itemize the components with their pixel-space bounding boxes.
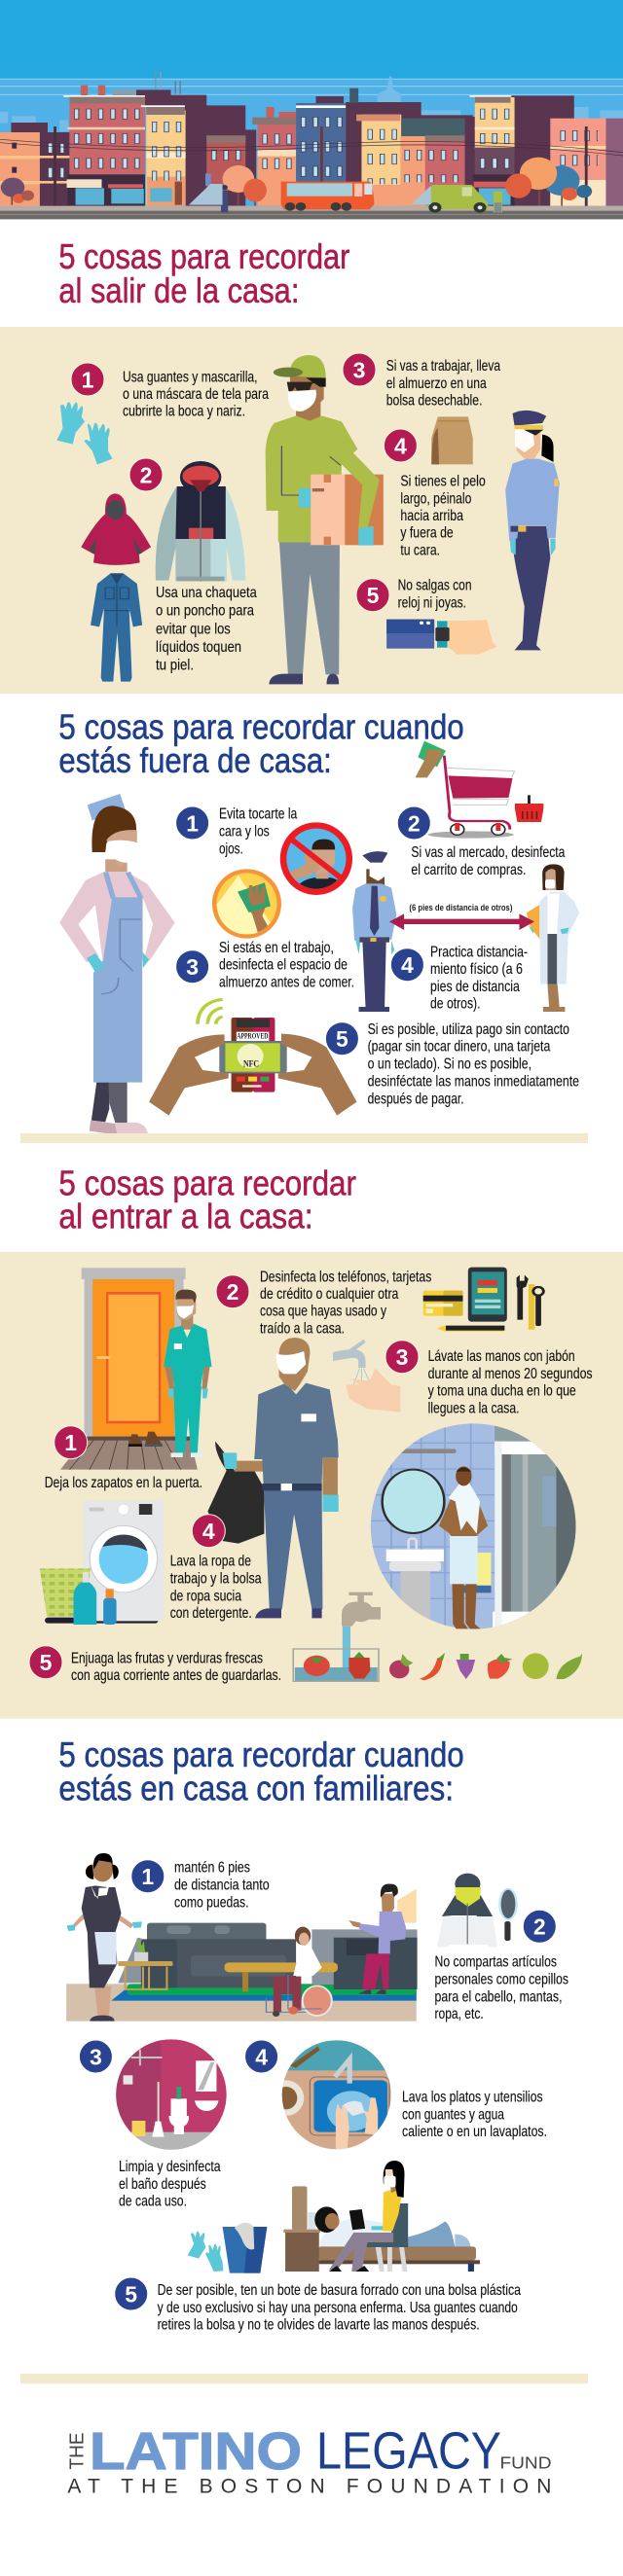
step 2 badge: [216, 1275, 249, 1308]
step 1 text: como puedas.: [174, 1894, 249, 1911]
step 1 badge: 1: [64, 1430, 77, 1455]
heading: al entrar a la casa: 5 cosas para recordar: [58, 1163, 356, 1202]
step 1 text: Evita tocarte la: [219, 806, 297, 823]
step 4 text: tu cara.: [400, 543, 440, 559]
step 2 text: de crédito o cualquier otra: [260, 1286, 398, 1303]
step 1 badge: [176, 806, 209, 840]
illustration: door with shoes: [60, 1268, 198, 1470]
step 1 text: [174, 1860, 270, 1911]
icon: blue coveralls: [91, 573, 142, 682]
step 5 text: con agua corriente antes de guardarlas.: [71, 1667, 281, 1684]
beige divider strip: [20, 1133, 588, 1143]
step 5 text: [71, 1650, 281, 1684]
step 3 text: Limpia y desinfecta: [119, 2159, 221, 2175]
figure: police officer: [352, 851, 396, 1012]
step 5 badge: [356, 579, 389, 612]
step 2 text: cosa que hayas usado y: [260, 1304, 386, 1320]
icon: shopping cart with basket: [416, 741, 543, 839]
step 3 badge: [79, 2040, 112, 2073]
illustration: living room with family: [66, 1853, 418, 2021]
step 3 text: el almuerzo en una: [386, 376, 487, 392]
step 3 badge: [385, 1341, 419, 1374]
step 3 text: [119, 2159, 221, 2210]
step 2 badge: [523, 1910, 556, 1943]
step 4 text: de otros).: [430, 996, 481, 1013]
step 3 text: almuerzo antes de comer.: [219, 975, 354, 991]
icon: paper bag: [431, 416, 473, 464]
step 4 text: trabajo y la bolsa: [170, 1570, 262, 1587]
icon: wrist with watch: [386, 620, 496, 655]
icon: gloves: [56, 402, 113, 464]
step 5 badge: [325, 1022, 358, 1055]
panel: beige background: [0, 1252, 623, 1719]
icon: fruits and vegetables row: [389, 1653, 582, 1680]
logo: The Latino Legacy Fund at the Boston Foundation: AT THE BOSTON FOUNDATION: [67, 2476, 551, 2498]
step 1 text: ojos.: [219, 841, 243, 858]
step 2 text: líquidos toquen: [156, 639, 241, 656]
icon: cards, tablet, tools: [423, 1268, 543, 1332]
step 2 badge: [129, 458, 163, 491]
icon: jacket: [156, 461, 245, 582]
step 1 text: cubrirte la boca y nariz.: [123, 404, 245, 420]
icon: jacket and hairbrush: [437, 1874, 518, 1948]
step 4 badge: 4: [401, 952, 414, 978]
step 4 text: pies de distancia: [430, 979, 520, 995]
step 2 text: o un poncho para: [156, 603, 254, 620]
heading: fuera de casa: estás fuera de casa:: [58, 740, 332, 780]
step 1 text: mantén 6 pies: [174, 1860, 250, 1877]
step 4 text: Lava la ropa de: [170, 1554, 251, 1570]
step 4 badge: [384, 429, 417, 462]
step 3 text: Si vas a trabajar, lleva: [386, 358, 500, 375]
icon: contactless payment: NFC: [243, 1059, 259, 1069]
step 4 badge: 4: [202, 1519, 215, 1544]
step 3 text: bolsa desechable.: [386, 393, 483, 410]
step 5 text: después de pagar.: [368, 1091, 464, 1107]
heading: al salir de la casa: 5 cosas para recordar: [58, 236, 349, 276]
step 5 text: (pagar sin tocar dinero, una tarjeta: [368, 1039, 550, 1055]
icon: contactless payment: APPROVED: [237, 1032, 269, 1041]
icon: faucet and washing hands: [333, 1340, 400, 1413]
label: 6 feet distance: (6 pies de distancia de otros): [409, 903, 512, 913]
icon: trash bin and gloves: [188, 2223, 267, 2273]
illustration: caring for sick person in bed: [283, 2161, 480, 2272]
icon: contactless payment: [149, 999, 357, 1116]
step 4 text: largo, péinalo: [400, 490, 471, 507]
step 2 text: traído a la casa.: [260, 1320, 345, 1337]
step 3 badge: [343, 353, 376, 386]
step 3 text: [219, 940, 354, 991]
step 2 text: Si vas al mercado, desinfecta: [411, 844, 565, 861]
step 2 text: el carrito de compras.: [411, 862, 526, 878]
step 3 badge: 3: [90, 2044, 102, 2069]
arrow: 6 feet distance: [389, 913, 534, 930]
step 3 text: Si estás en el trabajo,: [219, 940, 334, 956]
step 5 text: Enjuaga las frutas y verduras frescas: [71, 1650, 263, 1666]
step 4 text: [402, 2090, 547, 2140]
illustration: dishwashing circle: [282, 2040, 391, 2150]
step 5 text: [158, 2282, 521, 2334]
step 2 text: No compartas artículos: [434, 1954, 557, 1971]
figure: police woman: [505, 411, 560, 650]
step 2 badge: 2: [227, 1279, 238, 1305]
step 4 text: Practica distancia-: [430, 944, 528, 960]
step 2 badge: 2: [408, 810, 421, 836]
step 4 text: Lava los platos y utensilios: [402, 2090, 543, 2106]
step 4 badge: 4: [394, 433, 407, 458]
step 3 text: [428, 1348, 593, 1416]
step 2 badge: [397, 806, 430, 840]
step 3 text: Lávate las manos con jabón: [428, 1348, 575, 1365]
step 2 text: [156, 585, 257, 674]
figure: man with box: [266, 355, 384, 684]
step 3 text: y toma una ducha en lo que: [428, 1383, 576, 1400]
step 3 badge: 3: [396, 1344, 408, 1370]
heading: fuera de casa: [58, 706, 464, 780]
logo: The Latino Legacy Fund at the Boston Foundation: LEGACY: [316, 2422, 501, 2481]
heading: al entrar a la casa: al entrar a la casa:: [58, 1197, 313, 1236]
step 5 text: No salgas con: [398, 578, 471, 594]
step 3 badge: 3: [353, 357, 365, 382]
figure: man holding trash bag: [207, 1338, 339, 1618]
figure: nurse in apron: [59, 794, 175, 1135]
figure: man in scrubs: [164, 1290, 212, 1457]
step 4 text: y fuera de: [400, 525, 454, 542]
step 2 text: Usa una chaqueta: [156, 585, 257, 601]
heading: al salir de la casa: [58, 236, 349, 310]
step 2 text: [260, 1269, 431, 1337]
step 3 text: [386, 358, 500, 410]
step 2 text: [411, 844, 565, 878]
icon: faucet over tub with vegetables: [293, 1592, 381, 1681]
step 4 text: caliente o en un lavaplatos.: [402, 2124, 547, 2140]
step 2 text: evitar que los: [156, 621, 231, 637]
step 3 text: de cada uso.: [119, 2194, 187, 2210]
section 2: fuera de casa: [20, 706, 588, 1143]
step 1 text: cara y los: [219, 824, 270, 841]
illustration: bathroom cleaning circle: [116, 2038, 227, 2152]
step 5 badge: 5: [367, 583, 380, 608]
step 1 badge: 1: [82, 367, 94, 392]
section 1: al salir de la casa: [0, 236, 623, 694]
heading: al entrar a la casa: [58, 1163, 356, 1236]
step 1 text: o una máscara de tela para: [123, 386, 269, 403]
step 5 text: Si es posible, utiliza pago sin contacto: [368, 1021, 569, 1038]
step 4 badge: 4: [255, 2044, 268, 2069]
step 2 text: personales como cepillos: [434, 1971, 568, 1987]
step 5 badge: 5: [336, 1026, 348, 1052]
step 2 text: tu piel.: [156, 658, 194, 674]
step 5 text: [368, 1021, 579, 1107]
heading: en casa con familiares: [58, 1735, 464, 1808]
step 1 badge: [131, 1860, 165, 1893]
step 5 badge: [115, 2277, 148, 2310]
step 4 badge: [245, 2040, 278, 2073]
step 1 text: Usa guantes y mascarilla,: [123, 369, 257, 385]
logo: The Latino Legacy Fund at the Boston Foundation: THE: [66, 2432, 88, 2469]
step 3 badge: [176, 950, 209, 984]
step 4 text: Si tienes el pelo: [400, 473, 486, 489]
step 1 badge: [55, 1426, 88, 1459]
step 1 text: [123, 369, 269, 420]
step 5 badge: [29, 1646, 62, 1679]
step 2 badge: 2: [140, 462, 152, 487]
icon: washing machine: [40, 1500, 164, 1625]
icon: disinfecting cloth circle: [212, 869, 281, 939]
heading: en casa con familiares: estás en casa con familiares:: [58, 1769, 454, 1808]
icon: do not touch face sign: [280, 822, 352, 895]
icon: poncho: [81, 493, 151, 565]
step 2 text: para el cabello, mantas,: [434, 1988, 563, 2005]
panel: beige background: [0, 327, 623, 694]
step 4 text: de ropa sucia: [170, 1588, 241, 1604]
step 2 text: Desinfecta los teléfonos, tarjetas: [260, 1269, 431, 1285]
step 5 text: [398, 578, 471, 612]
figure: doctor in white coat: [527, 864, 579, 1012]
step 1 badge: [71, 363, 104, 396]
step 1 badge: 1: [186, 810, 199, 836]
step 3 text: desinfecta el espacio de: [219, 957, 348, 974]
logo: The Latino Legacy Fund at the Boston Foundation: [66, 2422, 551, 2498]
step 1 text: Deja los zapatos en la puerta.: [45, 1475, 202, 1491]
step 2 badge: 2: [533, 1914, 546, 1940]
step 4 text: con detergente.: [170, 1605, 252, 1622]
beige divider strip: [20, 2374, 588, 2383]
section 3: al entrar a la casa: [0, 1163, 623, 1719]
section 4: en casa con familiares: [20, 1735, 588, 2383]
banner: city street illustration: [0, 0, 623, 219]
step 5 text: reloj ni joyas.: [398, 595, 466, 612]
logo: The Latino Legacy Fund at the Boston Foundation: FUND: [500, 2453, 551, 2473]
step 2 text: [434, 1954, 568, 2022]
step 4 badge: [192, 1515, 225, 1548]
step 5 text: retires la bolsa y no te olvides de lavarte las manos después.: [158, 2317, 480, 2334]
step 4 badge: [390, 948, 423, 982]
step 5 text: De ser posible, ten un bote de basura forrado con una bolsa plástica: [158, 2282, 521, 2299]
step 4 text: con guantes y agua: [402, 2106, 504, 2123]
heading: al salir de la casa: al salir de la casa:: [58, 270, 299, 310]
step 1 text: de distancia tanto: [174, 1877, 270, 1893]
step 4 text: [170, 1554, 262, 1622]
step 4 text: [430, 944, 528, 1013]
step 5 badge: 5: [125, 2281, 137, 2307]
step 3 text: el baño después: [119, 2176, 206, 2193]
heading: fuera de casa: 5 cosas para recordar cuando: [58, 706, 464, 746]
step 4 text: [400, 473, 486, 559]
logo: The Latino Legacy Fund at the Boston Foundation: LATINO: [90, 2422, 302, 2481]
step 4 text: hacia arriba: [400, 508, 463, 524]
step 2 text: ropa, etc.: [434, 2006, 484, 2022]
step 4 text: miento físico (a 6: [430, 961, 523, 978]
heading: en casa con familiares: 5 cosas para recordar cuando: [58, 1735, 464, 1774]
step 5 badge: 5: [40, 1650, 53, 1675]
step 5 text: o un teclado). Si no es posible,: [368, 1056, 531, 1073]
step 3 text: llegues a la casa.: [428, 1400, 520, 1416]
step 5 text: y de uso exclusivo si hay una persona enferma. Usa guantes cuando: [158, 2300, 518, 2316]
illustration: bathroom with man in towel: [370, 1420, 578, 1634]
step 1 text: [219, 806, 297, 858]
step 1 badge: 1: [141, 1864, 154, 1889]
step 3 badge: 3: [186, 954, 199, 980]
